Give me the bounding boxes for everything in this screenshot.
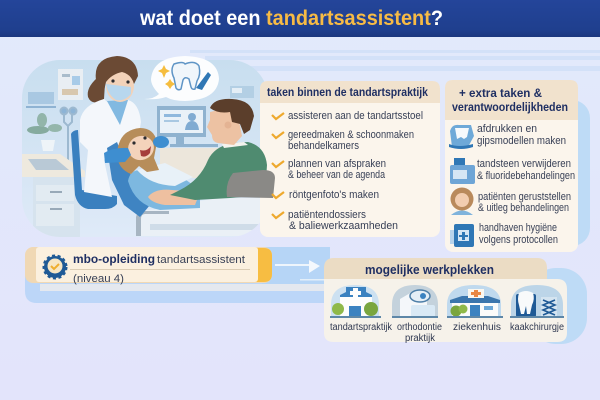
heading: + extra taken & xyxy=(459,86,542,100)
decorative streaks xyxy=(190,50,600,71)
shelf xyxy=(26,92,56,108)
workplace: kaakchirurgje: kaakchirurgje xyxy=(510,322,564,333)
icon: patient portrait xyxy=(450,188,474,215)
speech bubble with tooth xyxy=(144,56,219,101)
icon: tooth xyxy=(172,62,200,90)
task list: assisteren aan de tandartsstoel xyxy=(288,110,423,122)
task list: gereedmaken & schoonmaken xyxy=(288,129,414,141)
plant xyxy=(27,113,62,151)
task list: behandelkamers xyxy=(288,140,360,152)
assistant xyxy=(80,56,141,197)
icon: dental tool xyxy=(196,72,211,90)
header banner xyxy=(0,0,600,37)
panel: mogelijke werkplekken xyxy=(324,258,567,344)
task list: & beheer van de agenda xyxy=(288,169,385,181)
cabinet and tray xyxy=(22,154,85,237)
extra task list: afdrukken en xyxy=(477,123,537,135)
extra task list: & uitleg behandelingen xyxy=(478,202,569,214)
illustration background: clinic room xyxy=(22,60,275,237)
qualification text: mbo-opleiding xyxy=(73,252,155,266)
task list: patiëntendossiers xyxy=(288,209,367,221)
arrow xyxy=(309,260,320,273)
workplace: orthodontie praktijk xyxy=(392,285,442,344)
extra task list: & fluoridebehandelingen xyxy=(477,170,575,182)
heading: verantwoordelijkheden xyxy=(452,100,568,114)
panel: mbo-opleiding xyxy=(25,247,272,285)
patient xyxy=(117,128,200,210)
visitor chair xyxy=(227,170,275,198)
bed xyxy=(136,198,260,236)
heading xyxy=(452,86,568,114)
blue blob behind workplaces xyxy=(530,268,587,344)
monitor xyxy=(157,106,218,147)
title: wat doet een tandartsassistent? xyxy=(139,7,443,30)
poster xyxy=(58,69,83,100)
extra task list: tandsteen verwijderen xyxy=(477,158,571,170)
icon: badge xyxy=(44,256,66,278)
patient chair xyxy=(107,142,150,217)
extra task list: handhaven hygiëne xyxy=(479,222,557,234)
panel: extra taken xyxy=(445,80,578,252)
panel: mbo-opleiding: (niveau 4) xyxy=(73,273,124,285)
workplace: tandartspraktijk: tandartspraktijk xyxy=(330,322,393,333)
panel: mbo-opleiding: tandartsassistent xyxy=(157,254,245,266)
task list: plannen van afspraken xyxy=(288,158,386,170)
extra task list: volgens protocollen xyxy=(479,234,558,246)
task list: röntgenfoto's maken xyxy=(289,189,379,201)
workplace: tandartspraktijk xyxy=(330,285,393,333)
workplace: kaakchirurgje xyxy=(510,285,564,333)
workplace: ziekenhuis: ziekenhuis xyxy=(453,322,501,333)
workplace: orthodontie praktijk: praktijk xyxy=(405,333,436,344)
check icons xyxy=(272,113,284,218)
assistant stool back xyxy=(71,130,117,209)
right wall cabinet xyxy=(230,86,254,98)
heading: taken binnen de tandartspraktijk xyxy=(267,85,428,99)
workplace: orthodontie praktijk: orthodontie xyxy=(397,322,442,333)
icon: sparkles xyxy=(158,65,175,89)
panel: taken binnen de tandartspraktijk xyxy=(260,81,440,237)
instrument stand xyxy=(60,108,76,160)
extra task list xyxy=(477,123,575,246)
blue blob behind extra tasks xyxy=(540,100,590,246)
task list: & baliewerkzaamheden xyxy=(289,220,398,232)
icon: impression tray xyxy=(449,125,474,149)
icon: fluoride bottle xyxy=(450,158,475,184)
heading: mogelijke werkplekken xyxy=(365,263,494,277)
flow band with arrow xyxy=(25,247,330,303)
workplace: ziekenhuis xyxy=(447,285,503,333)
assistant gloves xyxy=(104,136,169,163)
icon: hygiene clipboard xyxy=(450,224,474,247)
task list xyxy=(288,110,423,232)
extra task list: gipsmodellen maken xyxy=(477,135,566,147)
counter xyxy=(160,148,220,178)
extra task list: patiënten geruststellen xyxy=(478,191,571,203)
scene foreground: people and dental chair xyxy=(71,56,275,217)
man xyxy=(170,99,267,200)
